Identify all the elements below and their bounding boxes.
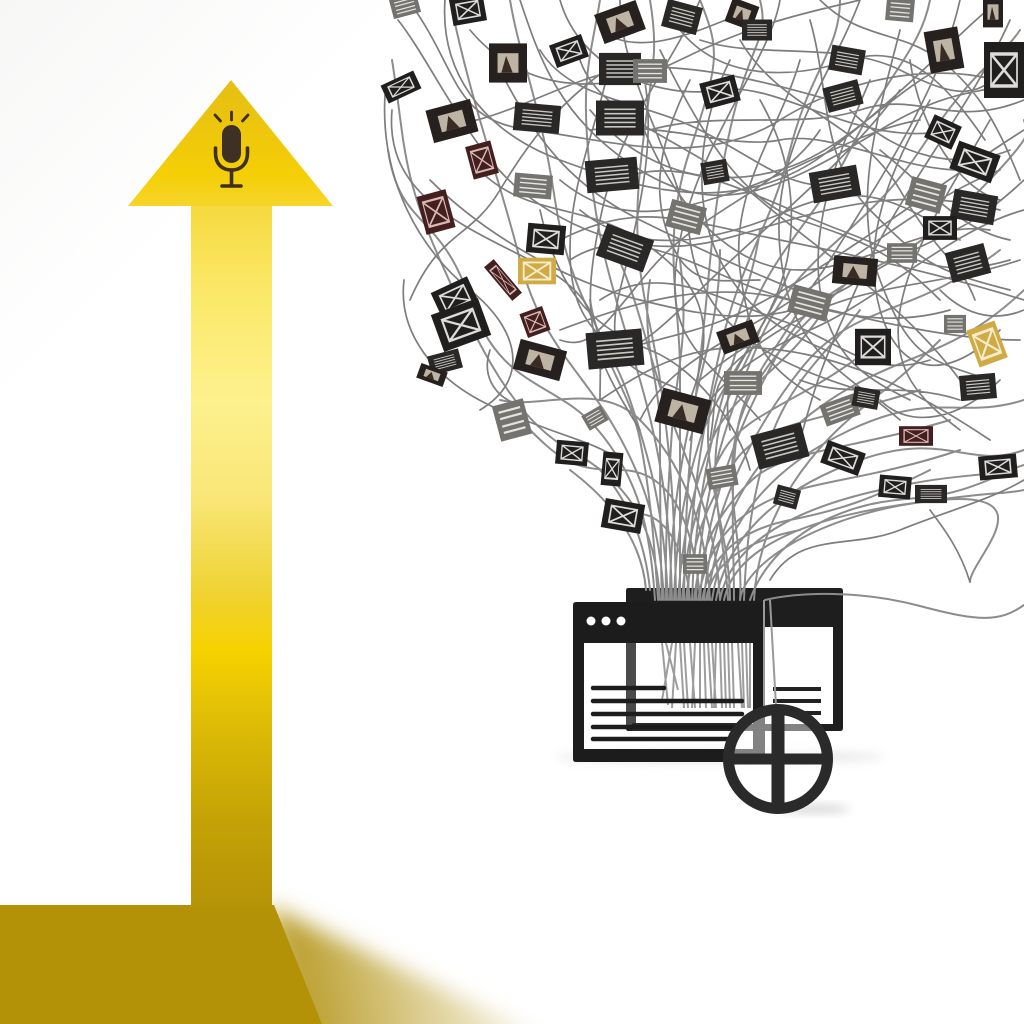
rising arrow (128, 80, 333, 907)
gold base (0, 905, 322, 1024)
wire tangle (385, 0, 1024, 618)
wires through window (662, 643, 750, 708)
text lines (593, 688, 750, 739)
floor glow fading from arrow base (268, 905, 560, 1024)
window shadows (555, 752, 885, 812)
front browser window (573, 600, 821, 762)
back browser window (626, 588, 843, 731)
icon: microphone (215, 112, 248, 186)
back-window edge seen through (626, 643, 636, 725)
arrow head (128, 80, 333, 206)
message tiles (381, 0, 1024, 574)
wires over the front window (764, 600, 776, 710)
window dots (586, 616, 626, 626)
wheel badge (726, 706, 830, 812)
arrow shaft (191, 205, 272, 907)
